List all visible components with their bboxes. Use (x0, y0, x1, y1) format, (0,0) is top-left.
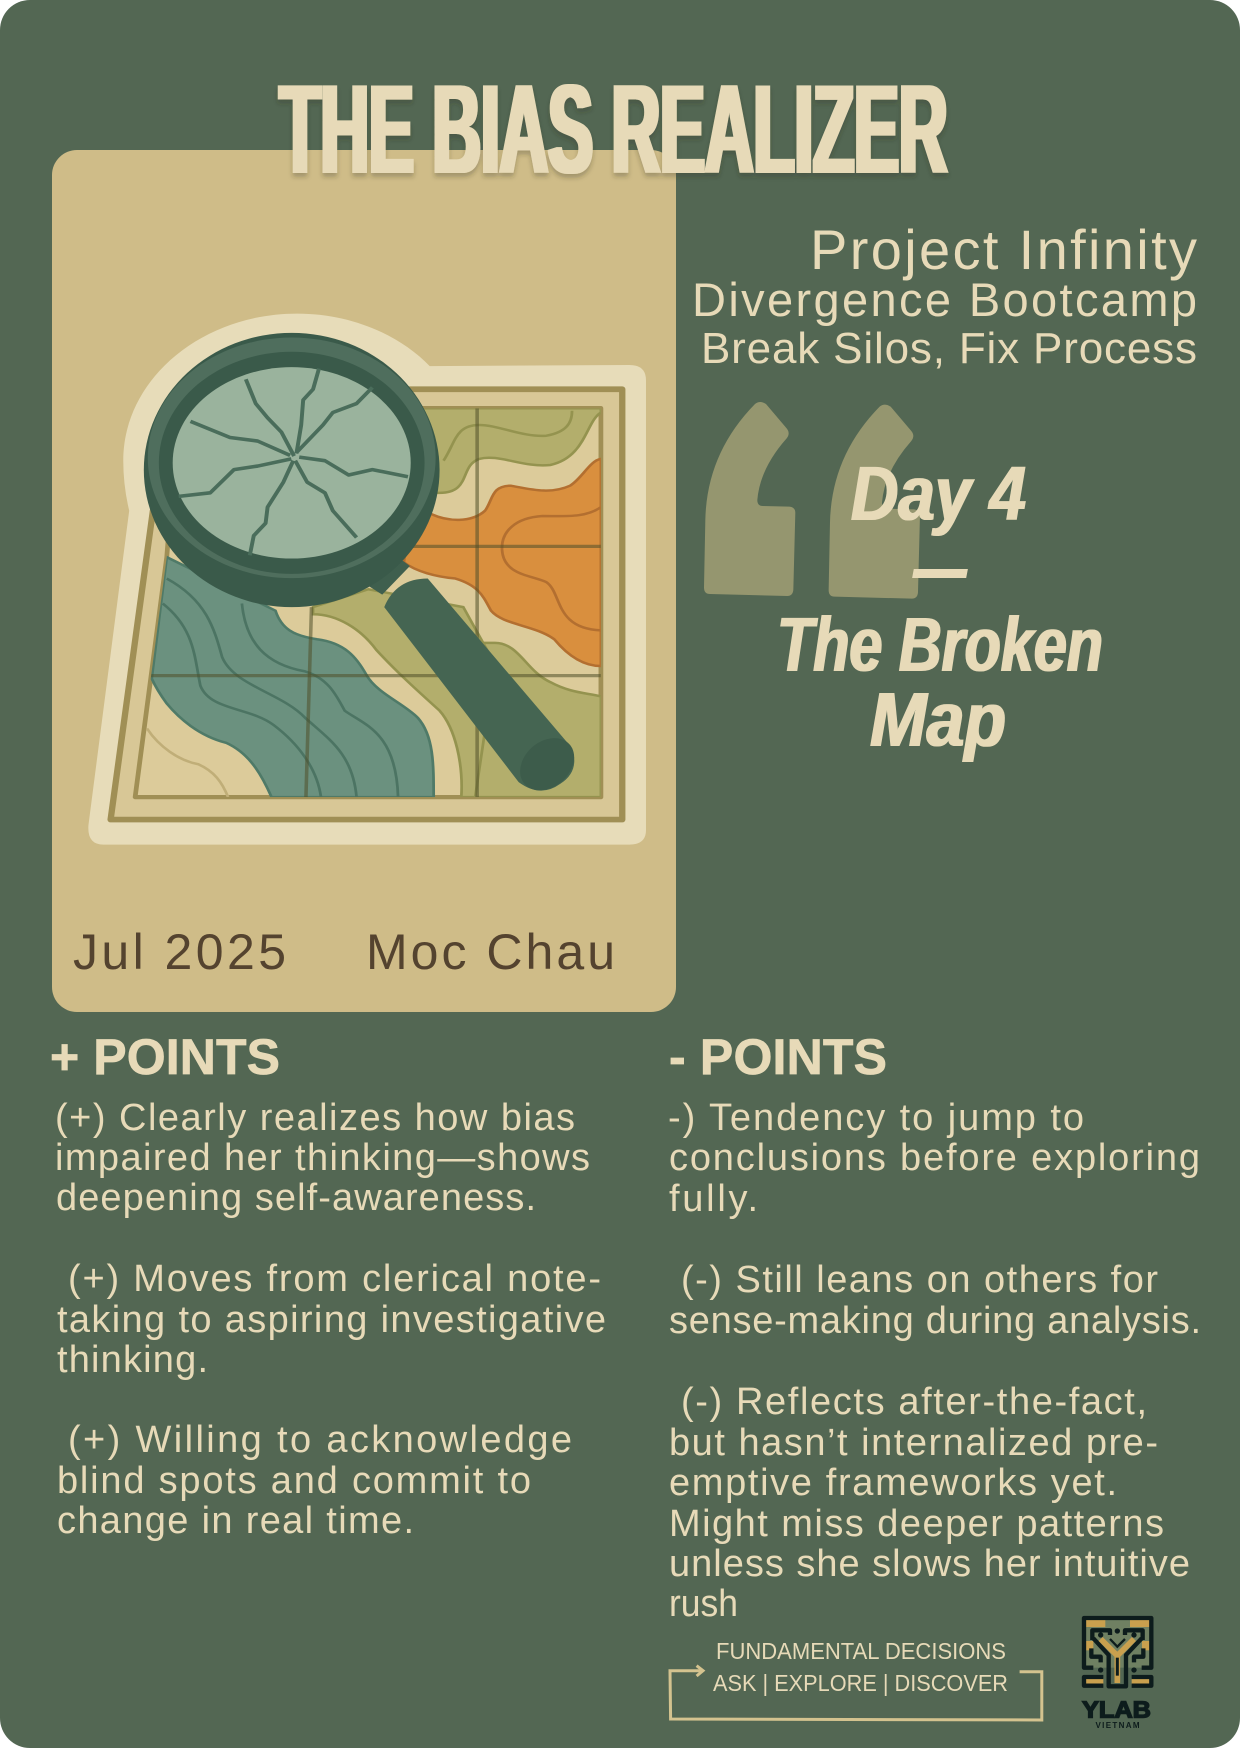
point 1: impaired her thinking—shows (55, 1137, 590, 1179)
logo: YLAB Vietnam (1082, 1618, 1151, 1730)
point 2: (-) Still leans on others for (681, 1259, 1158, 1301)
map outer frame (111, 389, 622, 820)
contour: upper olive (444, 411, 572, 461)
logo wordmark: YLAB (1082, 1696, 1151, 1722)
point 1 (668, 1097, 1200, 1220)
sticker outline (88, 314, 646, 845)
map grid lines (149, 408, 601, 797)
panel: negative points (668, 1029, 1201, 1625)
map terrain (147, 408, 601, 797)
footer tagline (670, 1638, 1042, 1720)
point 2: (+) Moves from clerical note- (68, 1258, 601, 1300)
point 2 (669, 1259, 1201, 1342)
heading: minus points: - POINTS (669, 1029, 887, 1085)
point 3: change in real time. (57, 1500, 414, 1542)
point 3: Might miss deeper patterns (669, 1503, 1164, 1545)
point 1: deepening self-awareness. (56, 1177, 536, 1219)
point 3: but hasn’t internalized pre- (669, 1422, 1158, 1464)
point 3: blind spots and commit to (57, 1460, 531, 1502)
tagline line 1: FUNDAMENTAL DECISIONS (716, 1638, 1006, 1664)
day title line 1: The Broken (777, 602, 1103, 688)
terrain: orange (404, 459, 601, 666)
terrain: upper olive (416, 408, 601, 493)
point 3 (57, 1419, 572, 1542)
point 2: taking to aspiring investigative (57, 1299, 606, 1341)
magnifier (144, 333, 585, 800)
heading: plus points: + POINTS (50, 1029, 280, 1085)
point 3: unless she slows her intuitive (669, 1543, 1190, 1585)
day heading (777, 451, 1103, 763)
terrain: lower olive right (475, 643, 601, 797)
glass cracks (179, 369, 408, 555)
point 1: (+) Clearly realizes how bias (55, 1097, 575, 1139)
magnifier inner rim (159, 352, 425, 574)
day number: Day 4 (851, 451, 1026, 537)
point 3: rush (669, 1583, 738, 1625)
tagline line 2: ASK | EXPLORE | DISCOVER (713, 1670, 1008, 1696)
panel: illustration card (52, 150, 676, 1012)
point 3: emptive frameworks yet. (669, 1462, 1117, 1504)
point 1: conclusions before exploring (669, 1137, 1200, 1179)
bootcamp name: Divergence Bootcamp (692, 273, 1197, 326)
terrain: teal river (152, 557, 434, 797)
panel: positive points (50, 1029, 606, 1542)
illustration: cracked magnifier over map (88, 314, 646, 845)
contour: orange (502, 507, 601, 630)
point 2: thinking. (57, 1339, 208, 1381)
point 1: -) Tendency to jump to (668, 1097, 1084, 1139)
point 1: fully. (669, 1178, 758, 1220)
handle end cap (509, 729, 585, 800)
logo mark (1084, 1618, 1151, 1686)
contour: lower left (147, 729, 228, 797)
map inner sheet (135, 408, 601, 797)
project name: Project Infinity (810, 218, 1197, 281)
tagline: Break Silos, Fix Process (701, 324, 1197, 373)
magnifier rim (144, 333, 440, 607)
point 2: sense-making during analysis. (669, 1300, 1201, 1342)
subtitle block (692, 218, 1197, 373)
contours: teal river (163, 579, 398, 797)
date label: Jul 2025 (73, 924, 286, 980)
point 3: (-) Reflects after-the-fact, (681, 1381, 1147, 1423)
magnifier rim highlight (148, 337, 436, 578)
location label: Moc Chau (366, 924, 615, 980)
magnifier connector (362, 550, 410, 595)
magnifier handle (384, 579, 574, 791)
point 2 (57, 1258, 606, 1381)
terrain: olive band (313, 589, 495, 797)
dash: — (914, 542, 966, 598)
quote marks (704, 402, 920, 599)
day title line 2: Map (870, 677, 1006, 763)
point 3 (669, 1381, 1190, 1625)
magnifier glass (173, 367, 411, 559)
logo subtext: VIETNAM (1096, 1721, 1140, 1730)
point 3: (+) Willing to acknowledge (68, 1419, 572, 1461)
point 1 (55, 1097, 590, 1219)
arrow frame (670, 1666, 1042, 1720)
